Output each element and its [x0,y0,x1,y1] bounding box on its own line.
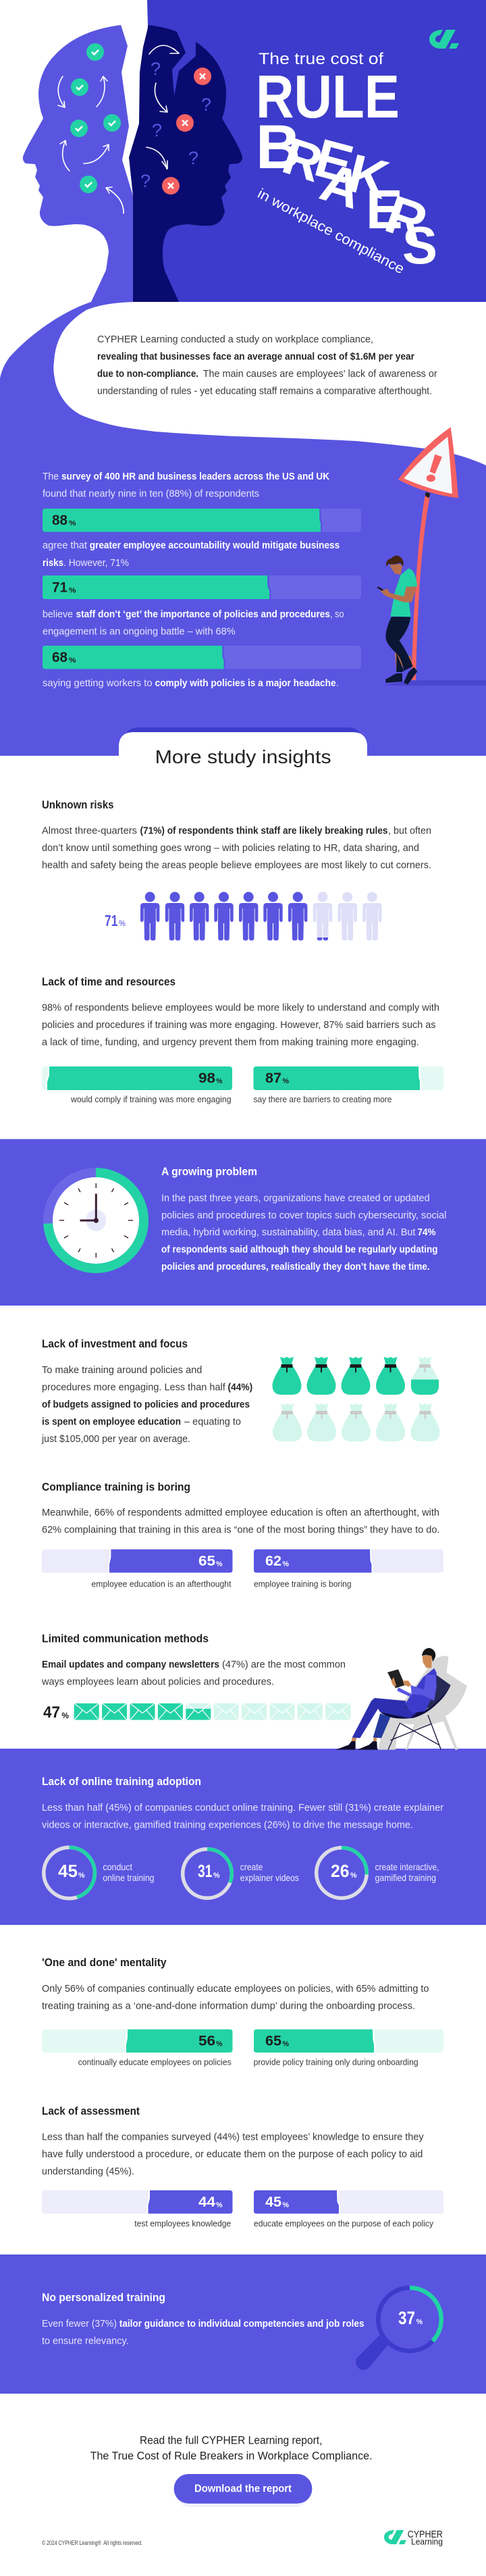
bar: 68% [43,646,361,669]
chair [400,1675,451,1711]
survey text and bars: The [43,471,59,482]
section: lack of investment and focus: (44%) [228,1382,252,1393]
green check badges [70,43,121,193]
chair shadow [378,1655,467,1750]
survey text and bars: . However, 71% [63,557,129,569]
survey text and bars: staff don’t ‘get’ the importance of policies and procedures [76,609,330,620]
right head: non-compliant [129,25,242,302]
section: limited communication methods [41,1633,350,1722]
bar: 88%: % [69,519,76,527]
stat: 71%: % [119,919,126,928]
left head: compliant [23,25,133,302]
panel: a growing problem: policies and procedures, realistically they don’t have the time. [161,1261,430,1272]
question marks: ? [151,59,161,79]
bar: 98%: 98 [198,1071,215,1086]
bar: 68%: 68 [52,650,68,665]
bar: 98%: % [216,1077,223,1085]
bar: 87% [254,1066,443,1104]
panel: a growing problem: A growing problem [161,1166,257,1178]
intro text [97,334,437,397]
warning sign [398,427,458,498]
title: R [378,184,435,253]
section: lack of time and resources: policies and procedures if training was more engaging. However, 87% said barriers such as [42,1019,436,1031]
panel: no personalized training: No personalized training [42,2292,165,2304]
bar: 62%: 62 [265,1553,281,1569]
white cycle arrows [58,45,179,213]
section: lack of investment and focus: procedures more engaging. Less than half [42,1382,226,1393]
donut: 26%: create interactive, [375,1861,439,1872]
section: lack of assessment: have fully understood a procedure, or educate them on the purpose of each policy to aid [42,2148,423,2160]
bar: 56%: 56 [198,2034,215,2049]
intro text: CYPHER Learning conducted a study on workplace compliance, [97,334,373,345]
section: lack of investment and focus: just $105,000 per year on average. [41,1433,190,1445]
title: A [314,151,369,220]
bar: 68%: % [69,656,76,665]
section: limited communication methods: Email updates and company newsletters [42,1659,219,1670]
title: E [366,179,403,240]
intro text: revealing that businesses face an average annual cost of $1.6M per year [97,351,414,362]
section: compliance training is boring: Meanwhile, 66% of respondents admitted employee education is often an afterthought, with [42,1507,439,1518]
icon: clock with 74 percent ring [48,1173,144,1268]
donut: 45%: online training [103,1872,154,1883]
section: lack of investment and focus [41,1338,440,1445]
donut: 31% [183,1849,299,1898]
button: download the report [174,2474,312,2507]
donut: 26%: 26 [331,1861,350,1881]
section: lack of assessment: understanding (45%). [42,2165,134,2178]
survey text and bars: . [336,677,339,689]
section: unknown risks [42,799,431,940]
section: unknown risks: health and safety being the areas people believe employees are most likely to cut corners. [42,859,431,871]
section: unknown risks: don’t know until something goes wrong – with policies relating to HR, data sharing, and [42,842,419,854]
panel: a growing problem: policies and procedures to cover topics such cybersecurity, social [161,1210,446,1221]
bar: 56% [42,2030,232,2067]
donut: 45%: conduct [103,1861,132,1872]
survey text and bars: survey of 400 HR and business leaders across the US and UK [61,471,329,482]
section: unknown risks: , but often [388,825,431,836]
illustration: man with phone under warning sign [377,427,486,686]
section: lack of time and resources [42,976,443,1104]
panel: a growing problem [0,1139,486,1306]
stat: 47%: 47 [43,1703,60,1722]
tablet and hands [387,1670,405,1688]
question marks: ? [188,148,198,168]
illustration: person reading tablet in chair [335,1648,467,1750]
section: one and done mentality: Only 56% of companies continually educate employees on policies, with 65% admitting to [42,1983,429,1994]
sign pole [411,495,430,680]
donut: 45%: 45 [58,1861,78,1881]
illustration: two heads [23,25,242,302]
section: limited communication methods: (47%) are the most common [222,1659,346,1670]
ground shadow [383,680,486,686]
bar: 88% [43,509,361,532]
man [395,653,404,672]
panel: lack of online training adoption: Less than half (45%) of companies conduct online training. Fewer still (31%) create explainer [42,1802,443,1813]
section: lack of assessment: Lack of assessment [42,2105,140,2117]
section: lack of investment and focus: is spent on employee education [42,1416,181,1428]
torso and front leg [352,1698,416,1738]
panel: a growing problem: of respondents said although they should be regularly updating [161,1244,437,1255]
bar: 65%: employee education is an afterthought [92,1579,232,1589]
panel: a growing problem: 74% [417,1227,436,1238]
section: unknown risks: Unknown risks [42,799,113,811]
intro text: understanding of rules - yet educating staff remains a comparative afterthought. [97,385,432,397]
donut: 45%: % [78,1872,85,1880]
icon: magnifying glass with 37 percent ring [356,2288,441,2370]
back leg and shoe [373,1714,390,1738]
question marks [140,59,211,191]
donut: 26%: % [350,1872,357,1880]
survey text and bars: found that nearly nine in ten (88%) of respondents [43,488,259,500]
section: compliance training is boring [42,1481,443,1589]
intro text: The main causes are employees' lack of awareness or [203,368,437,380]
stat: 71%: 71 [105,912,118,929]
call to action text [90,2434,373,2463]
section: lack of assessment: Less than half the companies surveyed (44%) test employees’ knowledge to ensure they [42,2132,424,2142]
bar: 62%: % [282,1560,289,1568]
section: lack of investment and focus: To make training around policies and [42,1364,202,1376]
pictogram: money bags, 44 percent filled [273,1357,440,1441]
title [255,50,437,277]
pictogram: ten envelopes, 47 percent filled [74,1703,350,1720]
bar: 71%: 71 [52,579,68,596]
donut: 26% [317,1848,439,1898]
bar: 56%: continually educate employees on policies [78,2057,232,2067]
stat: 47% [43,1703,69,1722]
bar: 71%: % [69,586,76,594]
section: one and done mentality: treating training as a ‘one-and-done information dump’ during the onboarding process. [42,2001,415,2011]
section: compliance training is boring: Compliance training is boring [42,1481,190,1493]
bar: 87%: 87 [265,1071,281,1086]
survey text and bars: saying getting workers to [43,677,153,689]
purple swoosh and survey section background [0,302,486,756]
icon: CYPHER logo mark [429,30,459,49]
donut: 26%: gamified training [375,1872,436,1883]
bar: 98%: would comply if training was more engaging [70,1094,231,1104]
hero background [133,0,486,302]
section: lack of investment and focus: – equating to [184,1416,241,1428]
section: limited communication methods: ways employees learn about policies and procedures. [41,1676,274,1687]
section: lack of investment and focus: Lack of investment and focus [42,1338,188,1350]
section: lack of time and resources: Lack of time and resources [42,976,176,988]
section: lack of time and resources: 98% of respondents believe employees would be more likely to understand and comply with [42,1002,439,1013]
bar: 65% onboarding: 65 [265,2034,281,2049]
survey text and bars: greater employee accountability would mitigate business [90,540,340,551]
bar: 44%: 44 [198,2194,215,2210]
bar: 44% [42,2190,232,2229]
survey text and bars [43,471,361,689]
bar: 45%: % [282,2201,289,2209]
donut: 31%: % [213,1872,220,1880]
title: S [402,215,437,275]
call to action text: The True Cost of Rule Breakers in Workplace Compliance. [90,2449,373,2463]
panel: no personalized training: tailor guidance to individual competencies and job roles [119,2318,364,2329]
footer logo: Learning [411,2536,443,2546]
arm [410,1674,437,1701]
title: R [276,126,329,193]
call to action text: Read the full CYPHER Learning report, [140,2434,322,2446]
pole clamp [425,492,430,498]
bar: 65% [42,1549,232,1589]
panel: a growing problem: In the past three years, organizations have created or updated [161,1193,430,1204]
stat: 47%: % [61,1711,69,1720]
donut: 31%: 31 [198,1861,212,1881]
panel: a growing problem: media, hybrid working, sustainability, data bias, and AI. But [161,1227,416,1238]
bar: 65% onboarding: provide policy training only during onboarding [254,2057,418,2067]
donut: 45% [44,1847,154,1899]
bar: 65%: 65 [198,1553,215,1569]
question marks: ? [140,171,151,191]
panel: lack of online training adoption [0,1749,486,1925]
section: one and done mentality: 'One and done' mentality [42,1957,167,1969]
survey text and bars: , so [330,609,344,620]
red cross badges [162,68,211,195]
title: The true cost of [259,50,383,68]
survey text and bars: agree that [43,540,88,551]
copyright: © 2024 CYPHER Learning® All rights reserved. [42,2540,142,2547]
section: unknown risks: Almost three-quarters [42,825,137,836]
survey text and bars: risks [43,557,63,569]
donut: 31%: explainer videos [240,1872,299,1883]
section: unknown risks: (71%) of respondents think staff are likely breaking rules [140,825,387,836]
pictogram: ten people, 71 percent filled [140,892,382,940]
bar: 44%: test employees knowledge [134,2218,231,2229]
panel: no personalized training: to ensure relevancy. [42,2336,129,2346]
bar: 87%: say there are barriers to creating more [254,1094,392,1104]
intro text: due to non-compliance. [97,368,198,380]
bar: 65%: % [216,1560,223,1568]
title: RULE [256,63,400,131]
footer logo: CYPHER [408,2529,443,2540]
bar: 45% [254,2190,443,2229]
section: limited communication methods: Limited communication methods [42,1633,209,1645]
button: download the report: Download the report [194,2483,292,2495]
bar: 88%: 88 [52,513,68,528]
bar: 87%: % [282,1077,289,1085]
section: lack of assessment [42,2105,443,2229]
question marks: ? [201,95,211,115]
icon: magnifying glass with 37 percent ring: 37 [398,2308,415,2328]
survey text and bars: comply with policies is a major headache [155,677,336,689]
panel: lack of online training adoption: videos or interactive, gamified training experiences (26%) to drive the message home. [42,1820,413,1830]
title: K [342,143,395,211]
bar: 44%: % [216,2201,223,2209]
question marks: ? [152,120,162,140]
bar: 45%: educate employees on the purpose of each policy [254,2218,433,2229]
panel: lack of online training adoption: Lack of online training adoption [42,1776,201,1788]
bar: 65% onboarding: % [282,2040,289,2049]
section: lack of investment and focus: of budgets assigned to policies and procedures [42,1399,250,1410]
section: lack of time and resources: a lack of time, funding, and urgency prevent them from making training more engaging. [42,1036,419,1048]
survey text and bars: engagement is an ongoing battle – with 68% [43,625,236,638]
section: one and done mentality [42,1957,443,2067]
bar: 98% [42,1066,232,1104]
bar: 62%: employee training is boring [254,1579,352,1589]
title: in workplace compliance [255,186,407,277]
heading tab: more study insights: More study insights [155,746,331,767]
panel: no personalized training: Even fewer (37%) [42,2318,117,2329]
title: B [256,113,300,182]
footer logo [384,2529,443,2546]
bar: 56%: % [216,2040,223,2049]
heading tab: more study insights [119,727,367,767]
panel: no personalized training [0,2255,486,2394]
bar: 65% onboarding [254,2030,443,2067]
icon: magnifying glass with 37 percent ring: % [416,2318,423,2326]
section: compliance training is boring: 62% complaining that training in this area is “one of the most boring things” they have to do. [42,1524,440,1536]
survey text and bars: believe [43,609,73,620]
bar: 45%: 45 [265,2194,281,2210]
title: E [309,127,359,195]
bar: 62% [254,1549,443,1589]
donut: 31%: create [240,1861,263,1872]
head [423,1655,432,1668]
bar: 71% [43,575,361,599]
